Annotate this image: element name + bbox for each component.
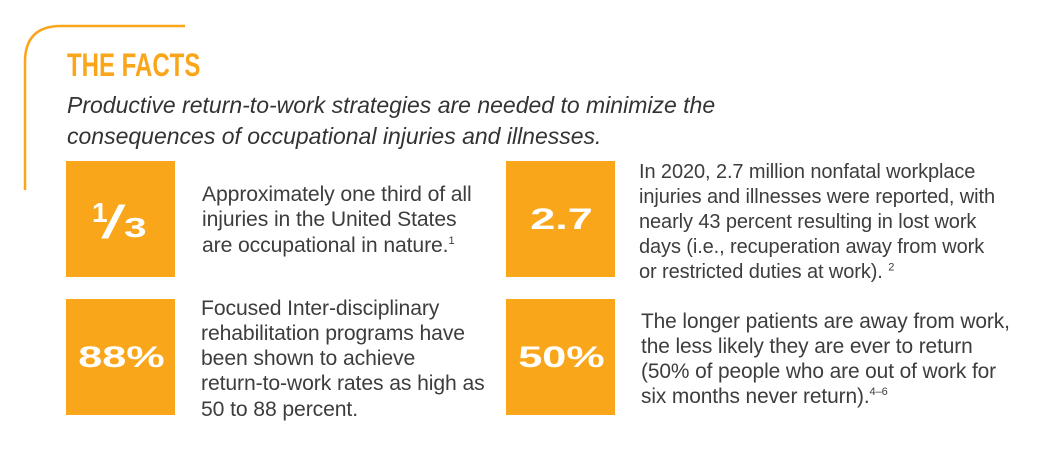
text: 50%: The longer patients are away from work, — [641, 310, 1010, 332]
text: 2.7 million: In 2020, 2.7 million nonfatal workplace — [639, 161, 975, 183]
stat box: 2.7: 2.7 — [530, 203, 593, 236]
text: 50%: the less likely they are ever to return — [641, 335, 973, 358]
text: 50%: (50% of people who are out of work for — [641, 360, 996, 383]
text: 88%: Focused Inter-disciplinary — [201, 296, 439, 320]
text: 50% — [641, 310, 1010, 408]
text: one third: Approximately one third of all — [202, 183, 472, 206]
text: 2.7 million: or restricted duties at work). 2 — [639, 261, 894, 283]
stat box: 88% — [66, 299, 175, 415]
text: one third: are occupational in nature.1 — [202, 234, 454, 257]
stat box: one third — [66, 161, 175, 277]
decorative corner bracket — [24, 24, 185, 190]
stat box: one third: / — [101, 196, 126, 248]
text: one third: injuries in the United States — [202, 208, 456, 231]
text: 2.7 million: injuries and illnesses were reported, with — [639, 186, 995, 208]
text: one third — [202, 183, 472, 257]
stat box: 50%: 50% — [518, 341, 605, 374]
text: 88%: 50 to 88 percent. — [201, 398, 358, 421]
text: 50%: six months never return).4–6 — [641, 385, 888, 408]
stat box: 88%: 88% — [78, 341, 165, 374]
title: THE FACTS — [67, 47, 200, 83]
subtitle — [67, 92, 715, 149]
text: 88%: return-to-work rates as high as — [201, 372, 485, 395]
text: 2.7 million — [639, 161, 995, 283]
stat box: one third: 3 — [124, 212, 147, 243]
text: 88% — [201, 296, 485, 421]
stat box: one third: 1 — [92, 197, 108, 228]
text: 88%: rehabilitation programs have — [201, 322, 465, 345]
text: 2.7 million: days (i.e., recuperation away from work — [639, 236, 984, 258]
stat box: 50% — [506, 299, 615, 415]
stat box: 2.7 — [506, 161, 615, 277]
subtitle: Productive return-to-work strategies are needed to minimize the — [67, 92, 715, 118]
text: 88%: been shown to achieve — [201, 347, 415, 370]
subtitle: consequences of occupational injuries and illnesses. — [67, 123, 601, 149]
text: 2.7 million: nearly 43 percent resulting in lost work — [639, 211, 976, 233]
